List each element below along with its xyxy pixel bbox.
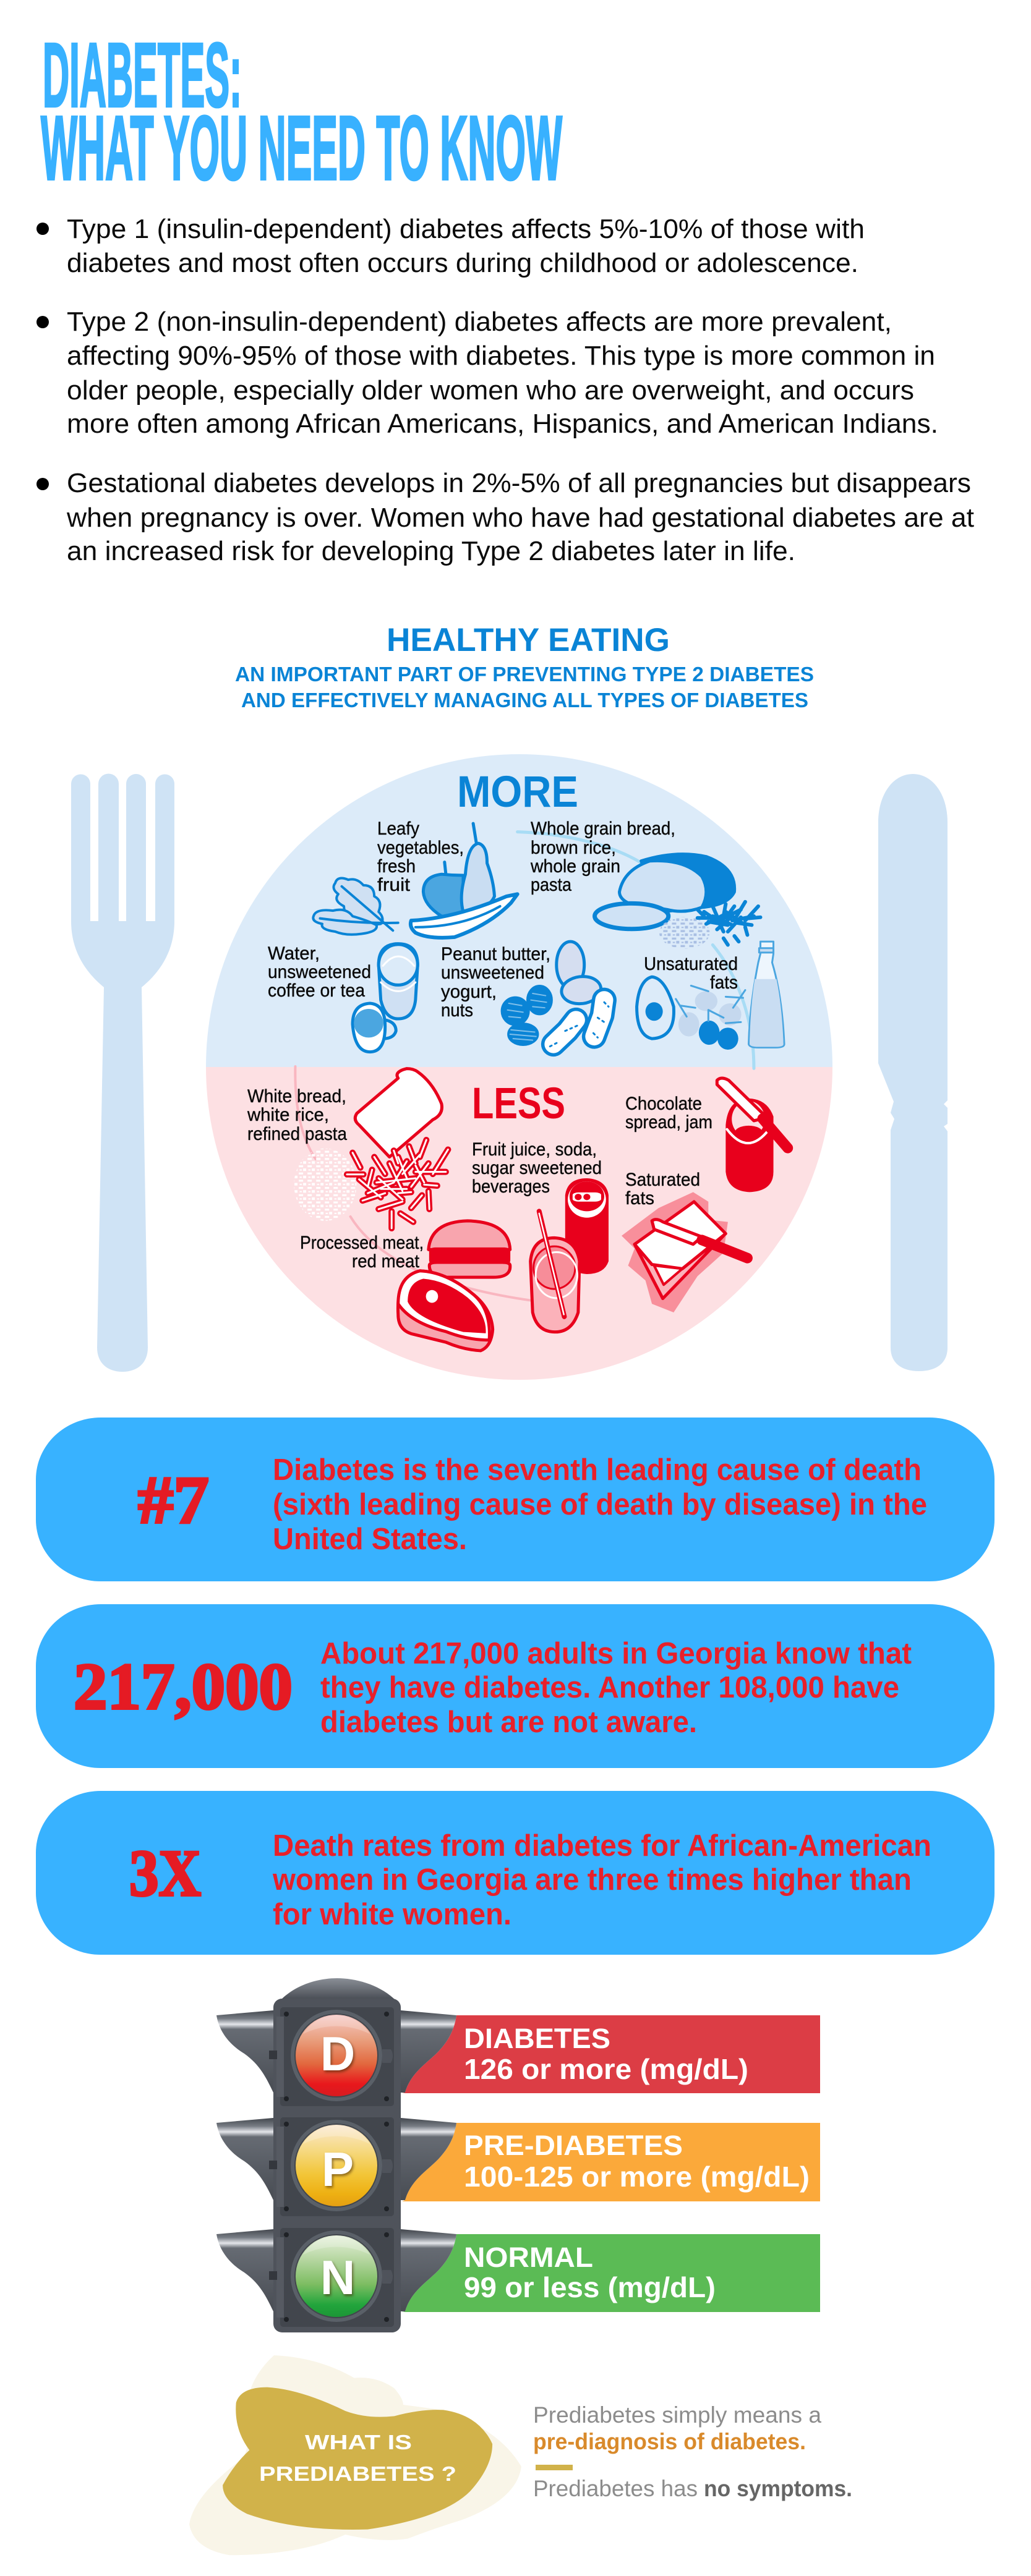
labels: more foods: whole grain [530,856,620,877]
icon: olives [676,985,745,1050]
icon: knife [878,774,948,1371]
labels: less foods: sugar sweetened [472,1158,602,1178]
plate: more half [206,754,832,1067]
bar: pre-diabetes: 100-125 or more (mg/dL) [464,2161,810,2193]
bullet: type 2 [36,307,938,439]
labels: less foods: Fruit juice, soda, [472,1139,597,1160]
icon: green lamp [296,2235,377,2317]
panel: more foods [313,823,784,1068]
bullet: gestational [36,468,974,566]
text: blob title: PREDIABETES ? [259,2462,456,2485]
bar: pre-diabetes [402,2123,820,2201]
heading: healthy eating: AN IMPORTANT PART OF PREVENTING TYPE 2 DIABETES [235,663,814,686]
bar: normal: NORMAL [464,2242,593,2273]
text: georgia adults: About 217,000 adults in Georgia know that [320,1637,912,1670]
labels: more foods: Leafy [377,818,419,839]
icon: fork [71,774,174,1372]
icon: white rice [294,1149,356,1221]
text: prediabetes definition: no symptoms. [704,2476,852,2501]
icon: red lamp [296,2015,377,2096]
panel: what is prediabetes [189,2355,852,2555]
bullet: type 1: Type 1 (insulin-dependent) diabetes affects 5%-10% of those with [67,214,865,244]
icon: refined pasta [347,1140,448,1228]
icon: burger [429,1221,510,1277]
bullet: type 2: affecting 90%-95% of those with diabetes. This type is more common in [67,341,935,371]
bullet: gestational: Gestational diabetes develops in 2%-5% of all pregnancies but disappears [67,468,971,498]
labels: more foods: Water, [268,943,320,964]
labels: more foods: unsweetened [441,963,544,983]
icon: nuts [502,942,604,1044]
text: death rates [272,1829,931,1931]
heading: healthy eating: AND EFFECTIVELY MANAGING ALL TYPES OF DIABETES [241,689,808,712]
icon: oil bottle [749,942,784,1047]
bar: diabetes [402,2015,820,2093]
icon: avocado [637,977,674,1039]
labels: more foods: vegetables, [377,838,464,858]
text: blob title [259,2431,456,2485]
labels: more foods: brown rice, [531,838,616,858]
panel: death rates [36,1791,995,1955]
text: death rates: for white women. [273,1898,511,1931]
icon: red lamp: D [320,2026,355,2081]
icon: juice glass [531,1211,580,1332]
labels: less foods: Processed meat, [300,1233,424,1253]
title [41,25,562,199]
icon: yellow lamp [296,2125,377,2206]
bullet: type 1: diabetes and most often occurs during childhood or adolescence. [67,248,858,278]
icon: traffic light housing [216,1978,456,2332]
labels: more foods: pasta [531,875,571,895]
icon: coffee cup [353,1003,396,1052]
heading: less: LESS [472,1079,565,1128]
text: blob title: WHAT IS [305,2431,412,2454]
bar: normal: 99 or less (mg/dL) [464,2271,716,2303]
icon: soda can [565,1178,609,1274]
labels: more foods: fats [710,972,738,993]
stat: #7: #7 [138,1463,209,1537]
icon: pale blob [189,2355,521,2555]
labels: less foods: refined pasta [247,1124,347,1144]
icon: whole grain bread [595,854,735,929]
text: prediabetes definition [533,2402,852,2501]
bar: pre-diabetes: PRE-DIABETES [464,2130,683,2161]
labels: less foods: red meat [352,1251,420,1272]
panel: seventh leading cause [36,1418,995,1581]
plate [206,754,832,1380]
icon: gold blob [223,2387,492,2530]
labels: more foods: Unsaturated [644,954,738,974]
heading: healthy eating: HEALTHY EATING [387,622,670,658]
heading: more: MORE [457,768,578,817]
text: seventh leading cause [273,1453,927,1556]
icon: butter [622,1192,747,1312]
bullet: type 2: Type 2 (non-insulin-dependent) diabetes affects are more prevalent, [67,307,892,337]
text: death rates: Death rates from diabetes for African-American [273,1829,931,1863]
icon: green lamp: N [320,2250,355,2305]
text: seventh leading cause: Diabetes is the seventh leading cause of death [273,1453,922,1487]
labels: more foods: Whole grain bread, [531,818,675,839]
icon: fruit [411,823,518,938]
labels: more foods: coffee or tea [268,980,365,1001]
text: prediabetes definition: Prediabetes simply means a [533,2402,821,2428]
text: georgia adults: diabetes but are not aware. [320,1706,697,1739]
plate: less half [206,1067,832,1380]
icon: white bread [355,1069,442,1157]
stat: 217,000: 217,000 [74,1651,293,1724]
text: prediabetes definition: Prediabetes has [533,2476,698,2501]
chart: blood glucose traffic light [216,1978,820,2332]
panel: georgia adults [36,1604,995,1768]
icon: yellow lamp: P [322,2142,354,2196]
labels: less foods: Saturated [625,1170,700,1190]
heading: healthy eating [235,622,814,712]
text: georgia adults [320,1637,912,1739]
text: seventh leading cause: (sixth leading cause of death by disease) in the [273,1488,927,1521]
labels: more foods: nuts [441,1000,473,1021]
labels: more foods: fresh [377,856,416,877]
icon: peanuts [550,1000,609,1047]
labels: less foods: spread, jam [625,1112,712,1133]
bullet: type 1 [36,214,865,278]
bullet: gestational: when pregnancy is over. Women who have had gestational diabetes are at [66,503,974,533]
bar: normal [402,2234,820,2312]
icon: leafy vegetables [313,878,398,935]
labels: more foods: Peanut butter, [441,944,550,964]
bullet: gestational: an increased risk for developing Type 2 diabetes later in life. [67,536,795,566]
bullet list: diabetes types [36,214,974,566]
text: seventh leading cause: United States. [273,1523,467,1556]
text: georgia adults: they have diabetes. Another 108,000 have [320,1671,899,1704]
bullet: type 2: older people, especially older women who are overweight, and occurs [67,375,914,406]
panel: less foods [294,1066,788,1351]
labels: more foods: unsweetened [268,962,371,982]
labels: more foods: yogurt, [441,982,497,1002]
labels: less foods: beverages [472,1176,550,1197]
labels: less foods: White bread, [247,1086,346,1107]
text: death rates: women in Georgia are three times higher than [272,1863,912,1897]
labels: less foods: white rice, [247,1105,329,1125]
text: prediabetes definition: pre-diagnosis of diabetes. [533,2429,806,2454]
labels: more foods: fruit [377,875,411,895]
labels: less foods: fats [625,1188,654,1209]
icon: chocolate spread jar [717,1078,788,1192]
icon: brown rice [659,902,760,949]
bar: diabetes: 126 or more (mg/dL) [464,2053,748,2085]
title: DIABETES: [43,25,242,126]
stat: 3X: 3X [129,1837,201,1910]
labels: less foods: Chocolate [625,1094,702,1114]
bar: diabetes: DIABETES [464,2023,610,2054]
icon: steak [398,1271,493,1351]
icon: water glass [379,944,417,1019]
labels: less foods [247,1086,712,1272]
labels: more foods [268,818,738,1021]
bullet: type 2: more often among African Americans, Hispanics, and American Indians. [67,409,938,439]
